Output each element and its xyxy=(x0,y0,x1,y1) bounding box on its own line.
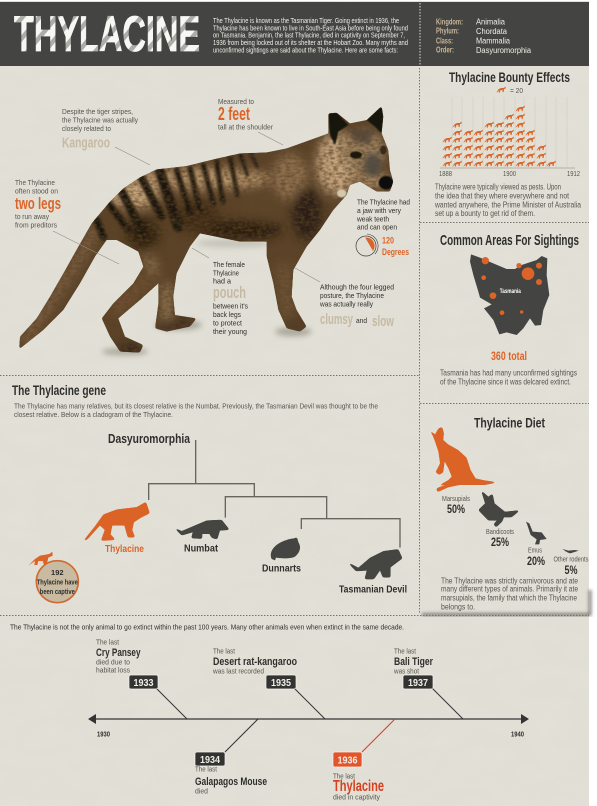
intro text: on Tasmania. Benjamin, the last Thylacine, died in captivity on September 7, xyxy=(213,31,405,40)
callout: two legs: two legs xyxy=(15,194,61,213)
event: 1935 xyxy=(212,646,297,689)
classification table: Chordata xyxy=(476,27,508,36)
event: 1933: 1933 xyxy=(134,677,154,689)
icon: dunnart xyxy=(271,538,300,560)
soft colouring xyxy=(23,130,390,350)
marsupials stat: 50% xyxy=(447,502,465,516)
diet description: belongs to. xyxy=(441,602,475,611)
species labels: Numbat xyxy=(184,542,218,554)
panel: sightings map xyxy=(440,232,579,386)
panel shadow xyxy=(422,590,590,614)
icon: kangaroo xyxy=(427,427,499,492)
panel: diet xyxy=(422,414,590,614)
event: 1934: died xyxy=(195,786,208,796)
event: 1936: The last xyxy=(333,772,356,780)
map label: Tasmania xyxy=(500,288,521,295)
event: 1936 xyxy=(333,752,384,802)
bandicoots stat xyxy=(486,527,514,549)
event: 1935: was last recorded xyxy=(212,666,264,676)
captive count badge xyxy=(36,561,78,603)
callout: clumsy and slow: clumsy xyxy=(320,311,353,328)
callout: pouch: between it's xyxy=(213,302,248,310)
icon: small thylacine xyxy=(28,552,53,566)
icon: bat xyxy=(562,549,579,553)
timeline intro: The Thylacine is not the only animal to go extinct within the past 100 years. Many other animals even when extinct in the same decade. xyxy=(10,622,404,632)
axis labels: 1912 xyxy=(567,169,580,178)
callout: clumsy and slow: was actually really xyxy=(319,300,373,308)
gene description xyxy=(14,402,378,419)
callout: two feet tall: Measured to xyxy=(218,97,254,106)
event: 1935: 1935 xyxy=(271,677,291,689)
callout: pouch: back legs xyxy=(213,310,241,319)
callout: two feet tall: tall at the shoulder xyxy=(218,122,273,132)
event: 1933: died due to xyxy=(96,658,130,666)
head details xyxy=(350,128,381,177)
callout: two legs xyxy=(15,178,119,264)
captive count text xyxy=(37,568,78,596)
callout: jaw opening: The Thylacine had xyxy=(357,198,410,206)
pictogram chart xyxy=(440,97,575,168)
classification table xyxy=(436,17,532,55)
legend: = 20 xyxy=(510,86,523,95)
bandicoots stat: Bandicoots xyxy=(486,527,514,536)
map of Tasmania xyxy=(470,254,549,335)
event: 1937: was shot xyxy=(393,666,420,676)
callout: related to kangaroo: Kangaroo xyxy=(62,134,110,152)
timeline axis: 1940 xyxy=(511,732,524,738)
callout: two legs: The Thylacine xyxy=(15,178,55,187)
panel: extinction timeline xyxy=(10,622,529,802)
callout: clumsy and slow: and xyxy=(356,316,367,325)
callout: pouch: their young xyxy=(213,327,247,336)
other rodents stat xyxy=(554,554,589,577)
classification table: Phylum: xyxy=(436,27,459,36)
captive count text: Thylacine have xyxy=(37,578,78,586)
event: 1935: The last xyxy=(213,646,236,656)
callout: two legs: to run away xyxy=(15,212,49,221)
callout: related to kangaroo xyxy=(62,107,150,165)
panel: bounty effects xyxy=(434,69,581,218)
heading: Thylacine Diet xyxy=(474,414,545,430)
callout: jaw opening: a jaw with very xyxy=(357,206,401,215)
captive count text: been captive xyxy=(40,587,75,596)
marsupials stat: Marsupials xyxy=(442,494,470,503)
heading: The Thylacine gene xyxy=(12,382,106,398)
callout: jaw opening: weak teeth xyxy=(356,214,389,224)
callout: pouch xyxy=(192,248,248,336)
gene description: closest relative. Below is a cladogram of the Thylacine. xyxy=(14,410,173,419)
callout: clumsy and slow xyxy=(295,268,394,330)
bounty description: the idea that they where everywhere and not xyxy=(435,192,570,201)
callout: jaw opening xyxy=(356,198,410,257)
legend xyxy=(496,86,523,95)
callout: jaw opening: Degrees xyxy=(382,247,409,257)
diet description xyxy=(441,576,578,611)
callout: pouch: Thylacine xyxy=(213,268,239,278)
bounty description xyxy=(434,182,581,218)
emus stat: Emus xyxy=(528,546,542,554)
callout: pouch: The female xyxy=(213,260,245,269)
event: 1937 xyxy=(393,646,434,689)
body stripes xyxy=(97,153,257,237)
callout: pouch: pouch xyxy=(213,283,246,302)
gene description: The Thylacine has many relatives, but its closest relative is the Numbat. Previously, the Tasmanian Devil was thought to be the xyxy=(14,402,378,410)
intro text: Thylacine has been known to live in South-East Asia before being only found xyxy=(213,23,408,32)
panel: thylacine photograph xyxy=(0,97,420,363)
bandicoots stat: 25% xyxy=(491,535,509,549)
cladogram root label: Dasyuromorphia xyxy=(108,431,191,446)
icon: bandicoot xyxy=(478,490,521,528)
event: 1933: Cry Pansey xyxy=(96,647,141,659)
classification table: Class: xyxy=(436,36,453,45)
callout: pouch: had a xyxy=(213,276,232,286)
event: 1934 xyxy=(195,752,267,796)
event: 1933 xyxy=(96,638,158,689)
species labels: Thylacine xyxy=(105,543,144,555)
emus stat xyxy=(527,546,545,568)
event: 1936: 1936 xyxy=(338,754,358,766)
callout: jaw opening: and can open xyxy=(357,223,397,232)
sightings description: of the Thylacine since it was delcared extinct. xyxy=(440,377,571,386)
other rodents stat: 5% xyxy=(564,563,578,577)
intro text xyxy=(213,16,408,54)
icon: tasmanian devil xyxy=(346,549,403,579)
callout: two legs: often stood on xyxy=(15,187,58,196)
icon: thylacine xyxy=(82,502,150,542)
ground shadows xyxy=(102,239,312,355)
classification table: Order: xyxy=(436,46,454,55)
event: 1936: Thylacine xyxy=(333,778,384,795)
intro text: unconfirmed sightings are said about the Thylacine. Here are some facts: xyxy=(213,45,398,54)
axis labels xyxy=(439,169,580,178)
event: 1937: The last xyxy=(394,646,417,656)
callout: two feet tall: 2 feet xyxy=(218,104,250,124)
captive count text: 192 xyxy=(51,568,64,577)
callout: clumsy and slow: slow xyxy=(372,313,394,330)
total sightings: 360 total xyxy=(491,349,527,363)
event: 1937: 1937 xyxy=(408,677,428,689)
marsupials stat xyxy=(442,494,470,516)
axis labels: 1888 xyxy=(439,169,452,178)
event: 1935: Desert rat-kangaroo xyxy=(213,656,297,668)
callout: related to kangaroo: closely related to xyxy=(62,124,111,133)
callout: clumsy and slow: posture, the Thylacine xyxy=(320,291,384,300)
classification table: Dasyuromorphia xyxy=(476,46,532,55)
callout: two feet tall xyxy=(218,97,283,145)
fur texture xyxy=(19,107,392,352)
panel: thylacine gene xyxy=(12,382,407,603)
timeline axis: 1930 xyxy=(97,732,110,738)
timeline axis xyxy=(88,688,529,752)
emus stat: 20% xyxy=(527,554,545,568)
header banner xyxy=(0,2,589,66)
sightings description xyxy=(440,368,577,386)
title: THYLACINE xyxy=(14,6,200,62)
species labels: Tasmanian Devil xyxy=(339,584,407,596)
axis labels: 1900 xyxy=(503,169,516,178)
callout: two legs: from preditors xyxy=(15,220,57,230)
species labels: Dunnarts xyxy=(262,562,301,574)
callout: jaw opening: 120 xyxy=(382,236,394,246)
event: 1936: died in captivity xyxy=(333,792,380,802)
callout: clumsy and slow: Although the four legged xyxy=(320,282,394,292)
event: 1933: habitat loss xyxy=(96,666,130,674)
classification table: Animalia xyxy=(476,18,506,27)
classification table: Kingdom: xyxy=(436,17,463,26)
icon: 120 degree pie xyxy=(356,234,378,256)
event: 1934: Galapagos Mouse xyxy=(195,776,267,788)
bounty description: set up a bounty to get rid of them. xyxy=(435,209,535,218)
event: 1933: The last xyxy=(96,638,120,646)
event: 1934: The last xyxy=(195,764,218,774)
intro text: The Thylacine is known as the Tasmanian Tiger. Going extinct in 1936, the xyxy=(213,16,399,25)
callout: pouch: to protect xyxy=(213,318,243,328)
icon: emu xyxy=(526,522,547,544)
species labels xyxy=(105,542,407,596)
icon: numbat xyxy=(173,520,230,540)
cladogram xyxy=(28,440,403,603)
event: 1934: 1934 xyxy=(200,754,220,766)
classification table: Mammalia xyxy=(476,37,510,46)
event: 1937: Bali Tiger xyxy=(394,656,434,668)
callout: related to kangaroo: the Thylacine was actually xyxy=(62,116,138,124)
callout: related to kangaroo: Despite the tiger stripes, xyxy=(62,107,133,116)
intro text: 1936 from being locked out of its shelter at the Hobart Zoo. Many myths and xyxy=(213,38,408,47)
